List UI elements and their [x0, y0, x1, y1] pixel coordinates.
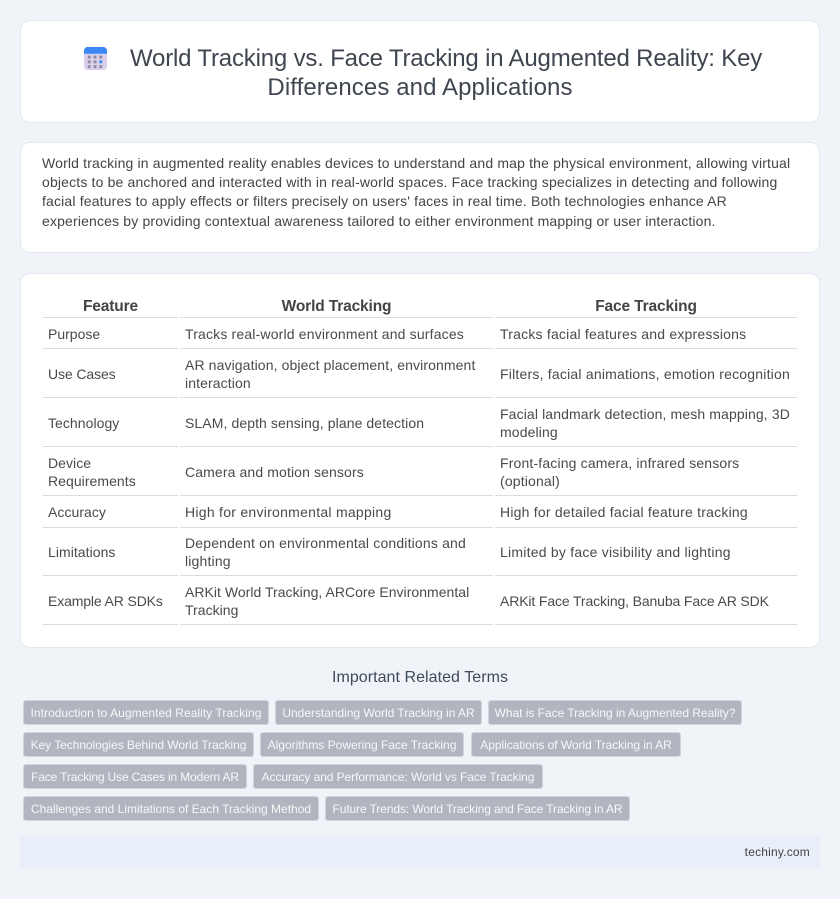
comparison table: Face Tracking — [595, 298, 697, 315]
footer source: techiny.com — [745, 845, 810, 859]
related terms tags: Introduction to Augmented Reality Tracking — [31, 706, 261, 720]
comparison table: Use Cases — [48, 366, 116, 382]
related terms tags: Future Trends: World Tracking and Face Tracking in AR — [333, 802, 622, 816]
comparison table: Dependent on environmental conditions and — [185, 535, 466, 551]
comparison table: interaction — [185, 375, 251, 391]
comparison table: Technology — [48, 415, 119, 431]
title: World Tracking vs. Face Tracking in Augmented Reality: Key — [130, 45, 762, 72]
intro text: World tracking in augmented reality enables devices to understand and map the physical environment, allowing virtual — [42, 155, 790, 171]
comparison table — [43, 298, 797, 625]
related terms tags: Applications of World Tracking in AR — [480, 738, 672, 752]
header card — [20, 20, 820, 123]
related terms tags: Accuracy and Performance: World vs Face Tracking — [262, 770, 534, 784]
related terms heading: Important Related Terms — [332, 669, 508, 686]
related terms tags — [23, 700, 742, 821]
icon: calendar grid — [84, 47, 108, 70]
related terms tags: Understanding World Tracking in AR — [282, 706, 475, 720]
comparison table: (optional) — [500, 473, 560, 489]
comparison table: Tracking — [185, 602, 238, 618]
comparison table: Device — [48, 455, 91, 471]
related terms tags: What is Face Tracking in Augmented Reality? — [495, 706, 735, 720]
table card — [20, 273, 820, 648]
intro text: experiences by providing contextual awareness tailored to either environment mapping or user interaction. — [42, 213, 716, 229]
title: Differences and Applications — [267, 74, 573, 101]
comparison table: Limitations — [48, 544, 115, 560]
comparison table: Accuracy — [48, 504, 106, 520]
comparison table: Limited by face visibility and lighting — [500, 544, 731, 560]
intro text: facial features to apply effects or filters precisely on users' faces in real time. Both technologies enhance AR — [42, 193, 727, 209]
comparison table: Front-facing camera, infrared sensors — [500, 455, 739, 471]
comparison table: Requirements — [48, 473, 136, 489]
comparison table: Example AR SDKs — [48, 593, 163, 609]
comparison table: Tracks real-world environment and surfaces — [185, 326, 464, 342]
comparison table: World Tracking — [282, 298, 391, 315]
comparison table: Feature — [83, 298, 138, 315]
comparison table: ARKit Face Tracking, Banuba Face AR SDK — [500, 593, 769, 609]
comparison table: AR navigation, object placement, environment — [185, 357, 475, 373]
intro text — [42, 155, 790, 229]
comparison table: Camera and motion sensors — [185, 464, 364, 480]
intro card — [20, 142, 820, 253]
comparison table: Facial landmark detection, mesh mapping, 3D — [500, 406, 790, 422]
related terms tags: Algorithms Powering Face Tracking — [268, 738, 456, 752]
comparison table: SLAM, depth sensing, plane detection — [185, 415, 424, 431]
intro text: objects to be anchored and interacted with in real-world spaces. Face tracking specializes in detecting and following — [42, 174, 777, 190]
title — [130, 45, 762, 101]
footer bar — [20, 835, 820, 869]
comparison table: Filters, facial animations, emotion recognition — [500, 366, 790, 382]
comparison table: High for environmental mapping — [185, 504, 392, 520]
related terms tags: Challenges and Limitations of Each Tracking Method — [31, 802, 311, 816]
related terms tags: Key Technologies Behind World Tracking — [31, 738, 246, 752]
related terms tags: Face Tracking Use Cases in Modern AR — [31, 770, 239, 784]
comparison table: High for detailed facial feature tracking — [500, 504, 748, 520]
comparison table: modeling — [500, 424, 558, 440]
comparison table: lighting — [185, 553, 231, 569]
comparison table: Purpose — [48, 326, 100, 342]
comparison table: ARKit World Tracking, ARCore Environmental — [185, 584, 469, 600]
comparison table: Tracks facial features and expressions — [500, 326, 746, 342]
